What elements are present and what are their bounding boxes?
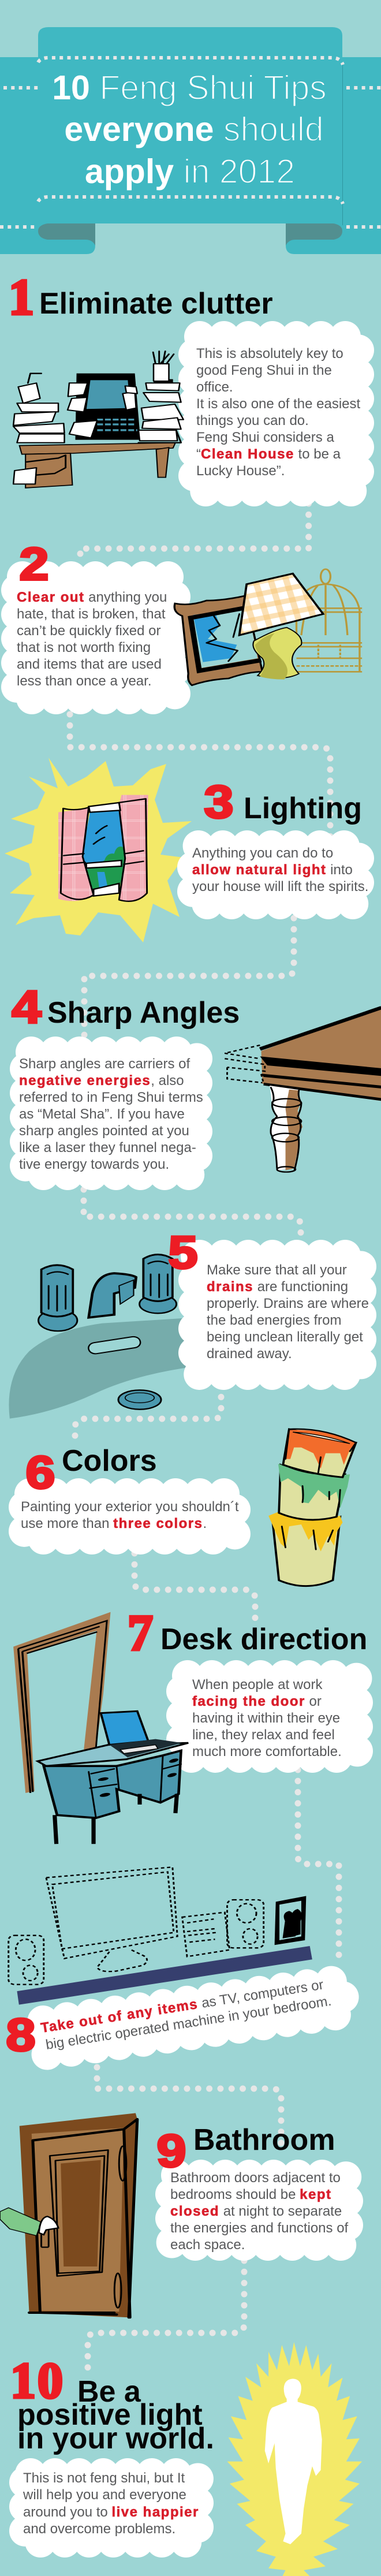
tip 3: lighting: [5, 758, 368, 942]
title: apply in 2012: [85, 152, 295, 191]
body text: big electric operated machine in your bedroom.: [44, 1993, 333, 2053]
heading: Colors: [62, 1444, 157, 1478]
heading: Be a: [77, 2375, 141, 2409]
body text: closed at night to separate: [170, 2204, 342, 2219]
number 8: 8: [6, 2010, 36, 2061]
body text: line, they relax and feel: [192, 1727, 335, 1743]
tip 2: clear out: [17, 539, 362, 699]
body text: Painting your exterior you shouldn´t: [21, 1499, 239, 1515]
body text: allow natural light into: [192, 862, 353, 878]
icon: cluttered desk: [13, 351, 184, 488]
heading: Bathroom: [193, 2123, 335, 2157]
tip 8: take out electric items: [6, 1867, 345, 2061]
icon: door frame and desk with laptop: [13, 1612, 188, 1844]
body text: Anything you can do to: [192, 845, 333, 861]
icon: sunburst: [5, 758, 192, 942]
icon: window with curtains: [58, 795, 148, 901]
body text: sharp angles pointed at you: [19, 1123, 189, 1139]
body text: negative energies, also: [19, 1073, 184, 1088]
tip 5: drains: [9, 1227, 369, 1419]
body text: that is not worth fixing: [17, 640, 151, 655]
body text: Feng Shui considers a: [196, 430, 334, 445]
ribbon left fold: [38, 223, 95, 245]
body text: around you to live happier: [23, 2504, 199, 2520]
thought cloud: [24, 1494, 235, 1539]
number 2: 2: [19, 539, 49, 590]
body text: good Feng Shui in the: [196, 363, 332, 378]
tip 10: be a positive light: [10, 2342, 362, 2576]
tip 4: sharp angles: [12, 982, 381, 1175]
heading: Eliminate clutter: [39, 287, 273, 320]
thought cloud: [193, 846, 358, 904]
body text: Clear out anything you: [17, 590, 167, 605]
body text: It is also one of the easiest: [196, 396, 360, 412]
header ribbon banner: [0, 27, 381, 254]
body text: facing the door or: [192, 1694, 322, 1709]
body text: the energies and functions of: [170, 2220, 349, 2236]
body text: Make sure that all your: [207, 1262, 347, 1278]
body text: Sharp angles are carriers of: [19, 1056, 190, 1072]
number 6: 6: [25, 1447, 55, 1498]
thought cloud: [194, 337, 358, 491]
body text: drained away.: [207, 1346, 292, 1362]
ribbon right tail: [286, 57, 381, 254]
body text: drains are functioning: [207, 1279, 348, 1295]
stitched dashes: [0, 58, 381, 227]
heading: positive light: [17, 2398, 203, 2432]
thought cloud: [25, 2474, 198, 2542]
body text: bedrooms should be kept: [170, 2187, 332, 2202]
icon: sink with taps: [9, 1255, 195, 1419]
body text: hate, that is broken, that: [17, 606, 166, 622]
tip 1: eliminate clutter: [9, 270, 360, 491]
heading: in your world.: [17, 2422, 214, 2455]
tip 6: colors: [21, 1429, 356, 1586]
body text: having it within their eye: [192, 1710, 340, 1726]
thought cloud: [38, 1980, 345, 2055]
body text: properly. Drains are where: [207, 1296, 369, 1311]
body text: like a laser they funnel nega-: [19, 1140, 196, 1155]
body text: your house will lift the spirits.: [192, 879, 368, 894]
number 4: 4: [12, 982, 42, 1033]
body text: When people at work: [192, 1677, 323, 1693]
number 1: 1: [9, 270, 34, 326]
number 5: 5: [168, 1227, 198, 1278]
body text: This is absolutely key to: [196, 346, 343, 361]
body text: can’t be quickly fixed or: [17, 623, 160, 639]
body text: use more than three colors.: [21, 1516, 207, 1531]
thought cloud: [171, 2175, 348, 2245]
title: 10 Feng Shui Tips: [52, 69, 327, 107]
body text: referred to in Feng Shui terms: [19, 1090, 203, 1105]
number 9: 9: [156, 2126, 186, 2177]
title: everyone should: [64, 110, 324, 148]
number 3: 3: [204, 777, 234, 828]
icon: door with hand on handle: [0, 2113, 137, 2317]
icon: shelf with removed electronics: [9, 1867, 312, 2005]
ribbon right fold: [286, 223, 342, 245]
body text: Lucky House”.: [196, 463, 285, 479]
body text: the bad energies from: [207, 1313, 341, 1328]
icon: glowing figure: [227, 2342, 362, 2576]
heading: Sharp Angles: [47, 996, 240, 1030]
body text: Bathroom doors adjacent to: [170, 2170, 341, 2186]
body text: office.: [196, 379, 233, 395]
body text: This is not feng shui, but It: [23, 2470, 185, 2486]
body text: “Clean House to be a: [196, 446, 341, 462]
body text: much more comfortable.: [192, 1744, 342, 1759]
tip 7: desk direction: [13, 1605, 367, 1844]
icon: table corner: [225, 1006, 381, 1172]
heading: Lighting: [244, 792, 362, 825]
icon: stacked paint cans: [268, 1429, 356, 1586]
body text: Take out of any items as TV, computers or: [40, 1977, 324, 2036]
body text: each space.: [170, 2237, 245, 2253]
thought cloud: [182, 1676, 357, 1757]
thought cloud: [17, 577, 175, 699]
body text: tive energy towards you.: [19, 1157, 169, 1172]
body text: will help you and everyone: [23, 2487, 186, 2503]
thought cloud: [194, 1255, 361, 1374]
ribbon main panel: [38, 27, 342, 223]
number 10: 10: [10, 2353, 65, 2409]
icon: birdcage, broken frame and lamp: [174, 569, 362, 685]
thought cloud: [25, 1052, 197, 1175]
number 7: 7: [128, 1605, 153, 1661]
ribbon left tail: [0, 57, 95, 254]
tip 9: bathroom: [0, 2113, 349, 2317]
body text: things you can do.: [196, 413, 309, 428]
body text: as “Metal Sha”. If you have: [19, 1106, 185, 1122]
body text: and items that are used: [17, 657, 162, 672]
heading: Desk direction: [160, 1623, 367, 1656]
body text: and overcome problems.: [23, 2521, 175, 2537]
body text: being unclean literally get: [207, 1329, 363, 1345]
body text: less than once a year.: [17, 673, 151, 689]
dotted connector path: [70, 504, 339, 2370]
